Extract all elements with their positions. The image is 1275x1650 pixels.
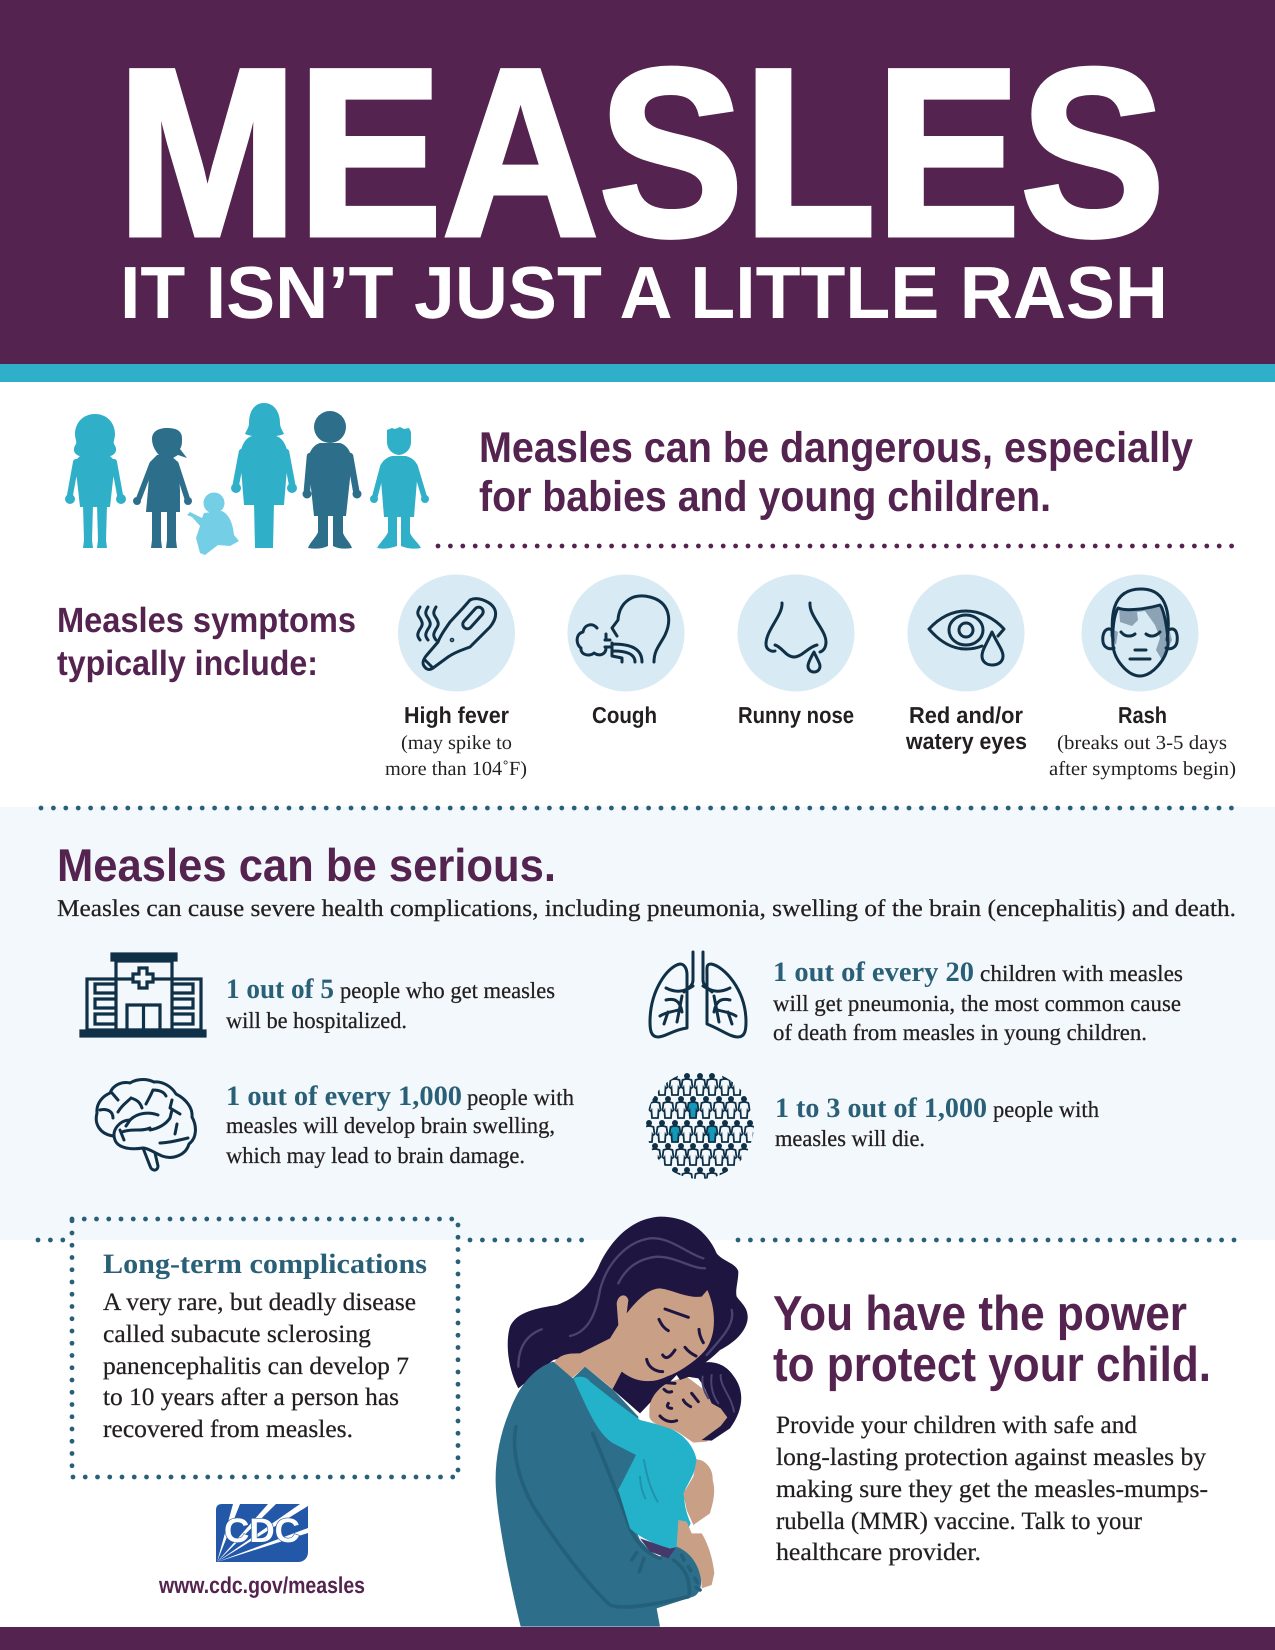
- stat: hospitalized: [226, 974, 555, 1033]
- heading: symptoms: [57, 601, 356, 683]
- baby top: [573, 1377, 697, 1548]
- panel: long-term complications: Long-term complications: [103, 1249, 427, 1280]
- stat: pneumonia: will get pneumonia, the most common cause: [773, 991, 1181, 1016]
- stat: deaths: people with: [993, 1097, 1099, 1122]
- text block: vaccine advice: healthcare provider.: [776, 1539, 981, 1566]
- boy with round hair: [302, 411, 362, 549]
- heading: dangerous for babies: [479, 424, 1193, 521]
- dotted section rule: [38, 1238, 1239, 1242]
- icon: face with rash: [1103, 589, 1177, 676]
- panel: long-term complications: to 10 years after a person has: [103, 1384, 399, 1411]
- tall girl: [231, 403, 297, 548]
- baby: [187, 492, 239, 555]
- panel: long-term complications: panencephalitis can develop 7: [103, 1353, 409, 1380]
- stat: brain swelling: [226, 1081, 574, 1168]
- symptom: high fever: High fever: [404, 702, 509, 728]
- baby's hair: [677, 1362, 741, 1441]
- icon: circle of people: [646, 1073, 754, 1179]
- sweater: [496, 1362, 701, 1627]
- symptom: cough: Cough: [592, 702, 657, 728]
- text block: vaccine advice: making sure they get the measles-mumps-: [776, 1476, 1208, 1503]
- heading: power to protect: [773, 1287, 1211, 1392]
- symptom: rash: Rash: [1118, 702, 1167, 728]
- text block: vaccine advice: rubella (MMR) vaccine. Talk to your: [776, 1508, 1143, 1535]
- heading: power to protect: You have the power: [773, 1287, 1187, 1341]
- heading: symptoms: Measles symptoms: [57, 601, 356, 640]
- panel: measles can be serious: [0, 807, 1275, 1240]
- stat: pneumonia: of death from measles in young children.: [773, 1020, 1147, 1045]
- CDC logo: CDC: [224, 1512, 300, 1550]
- symptom: rash: after symptoms begin): [1049, 758, 1236, 780]
- girl with ponytail: [133, 428, 192, 548]
- icon: hospital: [81, 954, 205, 1036]
- icon: nose: [766, 603, 826, 672]
- mother's hair: [508, 1217, 748, 1413]
- mother's skin: [553, 1288, 714, 1389]
- stat: hospitalized: will be hospitalized.: [226, 1008, 407, 1033]
- symptom: high fever: more than 104˚F): [385, 758, 527, 780]
- footer bar: [0, 1627, 1275, 1650]
- CDC logo: [216, 1504, 308, 1562]
- baby hand: [683, 1459, 714, 1525]
- symptom: high fever: [385, 574, 527, 780]
- symptom: red and watery eyes: Red and/or: [909, 702, 1023, 728]
- subtitle: IT ISN’T JUST A LITTLE RASH: [120, 251, 1168, 334]
- text block: vaccine advice: long-lasting protection against measles by: [776, 1444, 1207, 1471]
- heading: dangerous for babies: Measles can be dangerous, especially: [479, 424, 1193, 472]
- baby pants: [640, 1538, 677, 1558]
- symptom: rash: (breaks out 3-5 days: [1057, 732, 1227, 754]
- icon: lungs: [650, 952, 746, 1037]
- children silhouettes: [65, 403, 429, 555]
- stat: deaths: measles will die.: [775, 1126, 925, 1151]
- panel: long-term complications: A very rare, but deadly disease: [103, 1289, 416, 1316]
- stat: pneumonia: children with measles: [980, 961, 1183, 986]
- small boy: [370, 427, 429, 549]
- panel: long-term complications: recovered from measles.: [103, 1416, 353, 1443]
- heading: symptoms: typically include:: [57, 644, 318, 683]
- stat: hospitalized: people who get measles: [340, 978, 555, 1003]
- panel: long-term complications: [72, 1219, 458, 1477]
- girl with long hair: [65, 414, 126, 548]
- symptom: runny nose: Runny nose: [738, 702, 854, 728]
- panel: long-term complications: called subacute sclerosing: [103, 1321, 372, 1348]
- stat: brain swelling: which may lead to brain damage.: [226, 1143, 525, 1168]
- header banner: [0, 0, 1275, 382]
- section heading: Measles can be serious.: [57, 839, 556, 891]
- icon: eye with tear: [929, 611, 1004, 665]
- heading: dangerous for babies: for babies and young children.: [479, 473, 1051, 521]
- stat: brain swelling: people with: [467, 1085, 574, 1110]
- stat: deaths: [775, 1093, 1099, 1151]
- stat: pneumonia: 1 out of every 20: [773, 957, 974, 988]
- website url: www.cdc.gov/measles: [158, 1572, 365, 1598]
- symptom: rash: [1049, 574, 1236, 780]
- heading: power to protect: to protect your child.: [773, 1338, 1211, 1392]
- symptom: runny nose: [738, 574, 854, 728]
- text block: vaccine advice: [776, 1412, 1208, 1566]
- illustration: mother and baby: [496, 1217, 748, 1627]
- stat: brain swelling: measles will develop brain swelling,: [226, 1113, 555, 1138]
- symptom: cough: [568, 574, 684, 728]
- hair highlights: [518, 1238, 732, 1367]
- faces: [647, 1309, 703, 1422]
- mother's hand: [677, 1520, 714, 1588]
- icon: coughing head: [577, 596, 669, 662]
- icon: brain: [96, 1080, 195, 1170]
- sweater folds: [515, 1427, 700, 1607]
- symptom: red and watery eyes: [905, 574, 1027, 754]
- section intro: Measles can cause severe health complications, including pneumonia, swelling of the brain (encephalitis) and death.: [57, 896, 1236, 922]
- icon: thermometer: [418, 599, 496, 669]
- symptom: high fever: (may spike to: [401, 732, 512, 754]
- stat: hospitalized: 1 out of 5: [226, 974, 334, 1005]
- stat: pneumonia: [773, 957, 1183, 1045]
- stat: brain swelling: 1 out of every 1,000: [226, 1081, 462, 1112]
- stat: deaths: 1 to 3 out of 1,000: [775, 1093, 987, 1124]
- symptom: red and watery eyes: watery eyes: [905, 728, 1027, 754]
- title: MEASLES: [117, 19, 1165, 286]
- text block: vaccine advice: Provide your children with safe and: [776, 1412, 1138, 1439]
- baby's head: [649, 1377, 728, 1443]
